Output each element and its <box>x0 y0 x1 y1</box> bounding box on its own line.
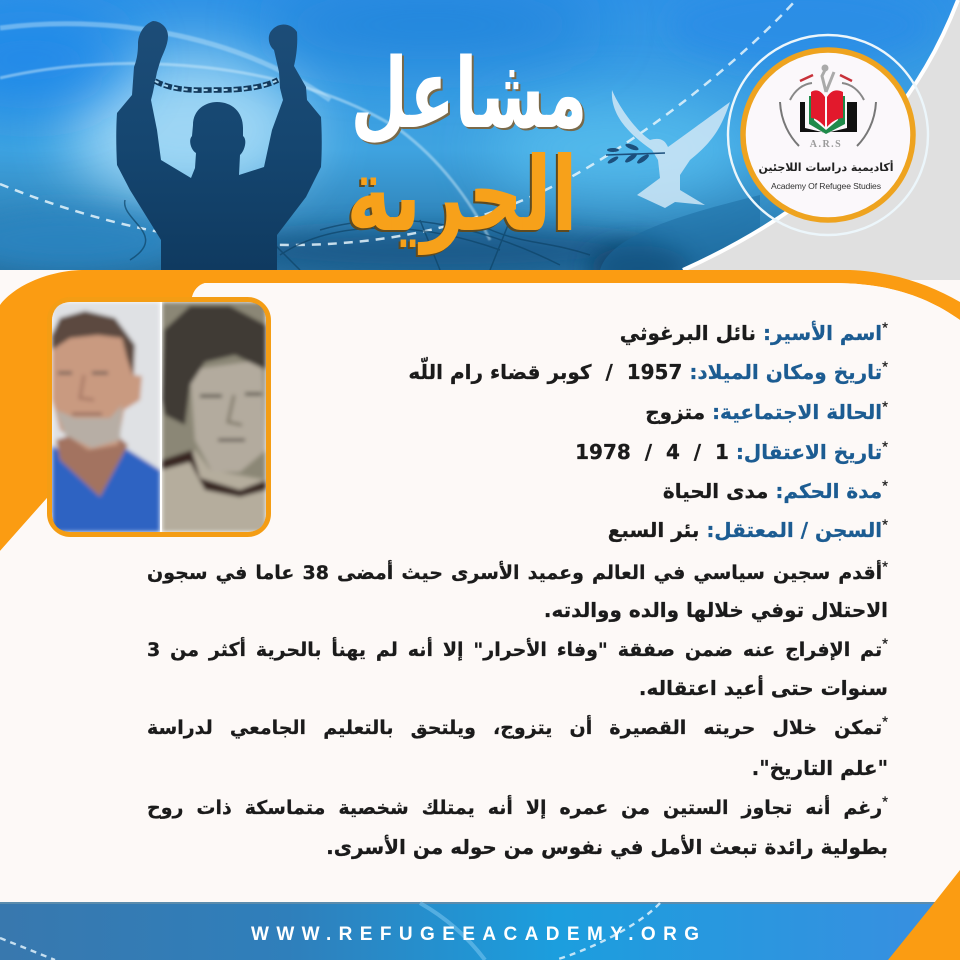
photo frame <box>50 300 268 534</box>
chain <box>155 80 278 90</box>
website address: WWW.REFUGEEACADEMY.ORG <box>251 924 699 945</box>
paragraph line 4: سنوات حتى أعيد اعتقاله. <box>639 676 888 700</box>
footer orange corner <box>888 870 960 960</box>
footer bar <box>0 903 960 960</box>
field: prisoner name: *اسم الأسير: نائل البرغوثي <box>620 319 888 345</box>
orange band <box>0 270 960 551</box>
header white edge <box>683 0 958 270</box>
title: الحرية <box>346 136 578 255</box>
icon: prisoner silhouette with chain <box>116 21 322 270</box>
title <box>344 37 589 257</box>
field: marital status: *الحالة الاجتماعية: متزوج <box>645 398 888 424</box>
logo english name: Academy Of Refugee Studies <box>771 181 881 191</box>
field: birth date and place: *تاريخ ومكان الميلاد: 1957 / كوبر قضاء رام اللّه <box>408 358 888 384</box>
barbed wire <box>125 200 590 270</box>
logo book: A.R.S <box>810 139 842 150</box>
dashed line <box>0 0 796 245</box>
title: الحرية <box>344 138 576 257</box>
header banner <box>0 0 960 290</box>
paragraph line 8: بطولية رائدة تبعث الأمل في نفوس من حوله من الأسرى. <box>326 835 888 859</box>
logo book <box>780 64 876 150</box>
paragraph line 3: *تم الإفراج عنه ضمن صفقة "وفاء الأحرار" إلا أنه لم يهنأ بالحرية أكثر من 3 <box>147 636 888 661</box>
paragraph line 6: "علم التاريخ". <box>752 756 888 780</box>
field: arrest date: *تاريخ الاعتقال: 1 / 4 / 1978 <box>575 438 888 464</box>
field: prison: *السجن / المعتقل: بئر السبع <box>608 516 888 542</box>
footer light lines <box>420 903 485 960</box>
logo badge <box>728 35 928 235</box>
portrait: archive photo <box>162 302 266 532</box>
paragraph line 7: *رغم أنه تجاوز الستين من عمره إلا أنه يمتلك شخصية متماسكة ذات روح <box>147 794 888 819</box>
title: مشاعل <box>351 37 587 150</box>
light arcs <box>0 24 330 100</box>
portrait: current photo <box>52 302 160 532</box>
mesh fence <box>600 195 760 270</box>
paragraph line 5: *تمكن خلال حريته القصيرة أن يتزوج، ويلتحق بالتعليم الجامعي لدراسة <box>147 714 888 739</box>
grey corner panel <box>600 0 960 280</box>
paragraph line 1: *أقدم سجين سياسي في العالم وعميد الأسرى حيث أمضى 38 عاما في سجون <box>147 559 888 584</box>
paragraph line 2: الاحتلال توفي خلالها والده ووالدته. <box>544 598 888 622</box>
icon: dove with olive branch <box>606 90 730 208</box>
logo calligraphy: أكاديمية دراسات اللاجئين <box>758 160 894 174</box>
body panel <box>0 283 960 903</box>
title: مشاعل <box>353 39 589 152</box>
field: sentence: *مدة الحكم: مدى الحياة <box>663 477 888 503</box>
